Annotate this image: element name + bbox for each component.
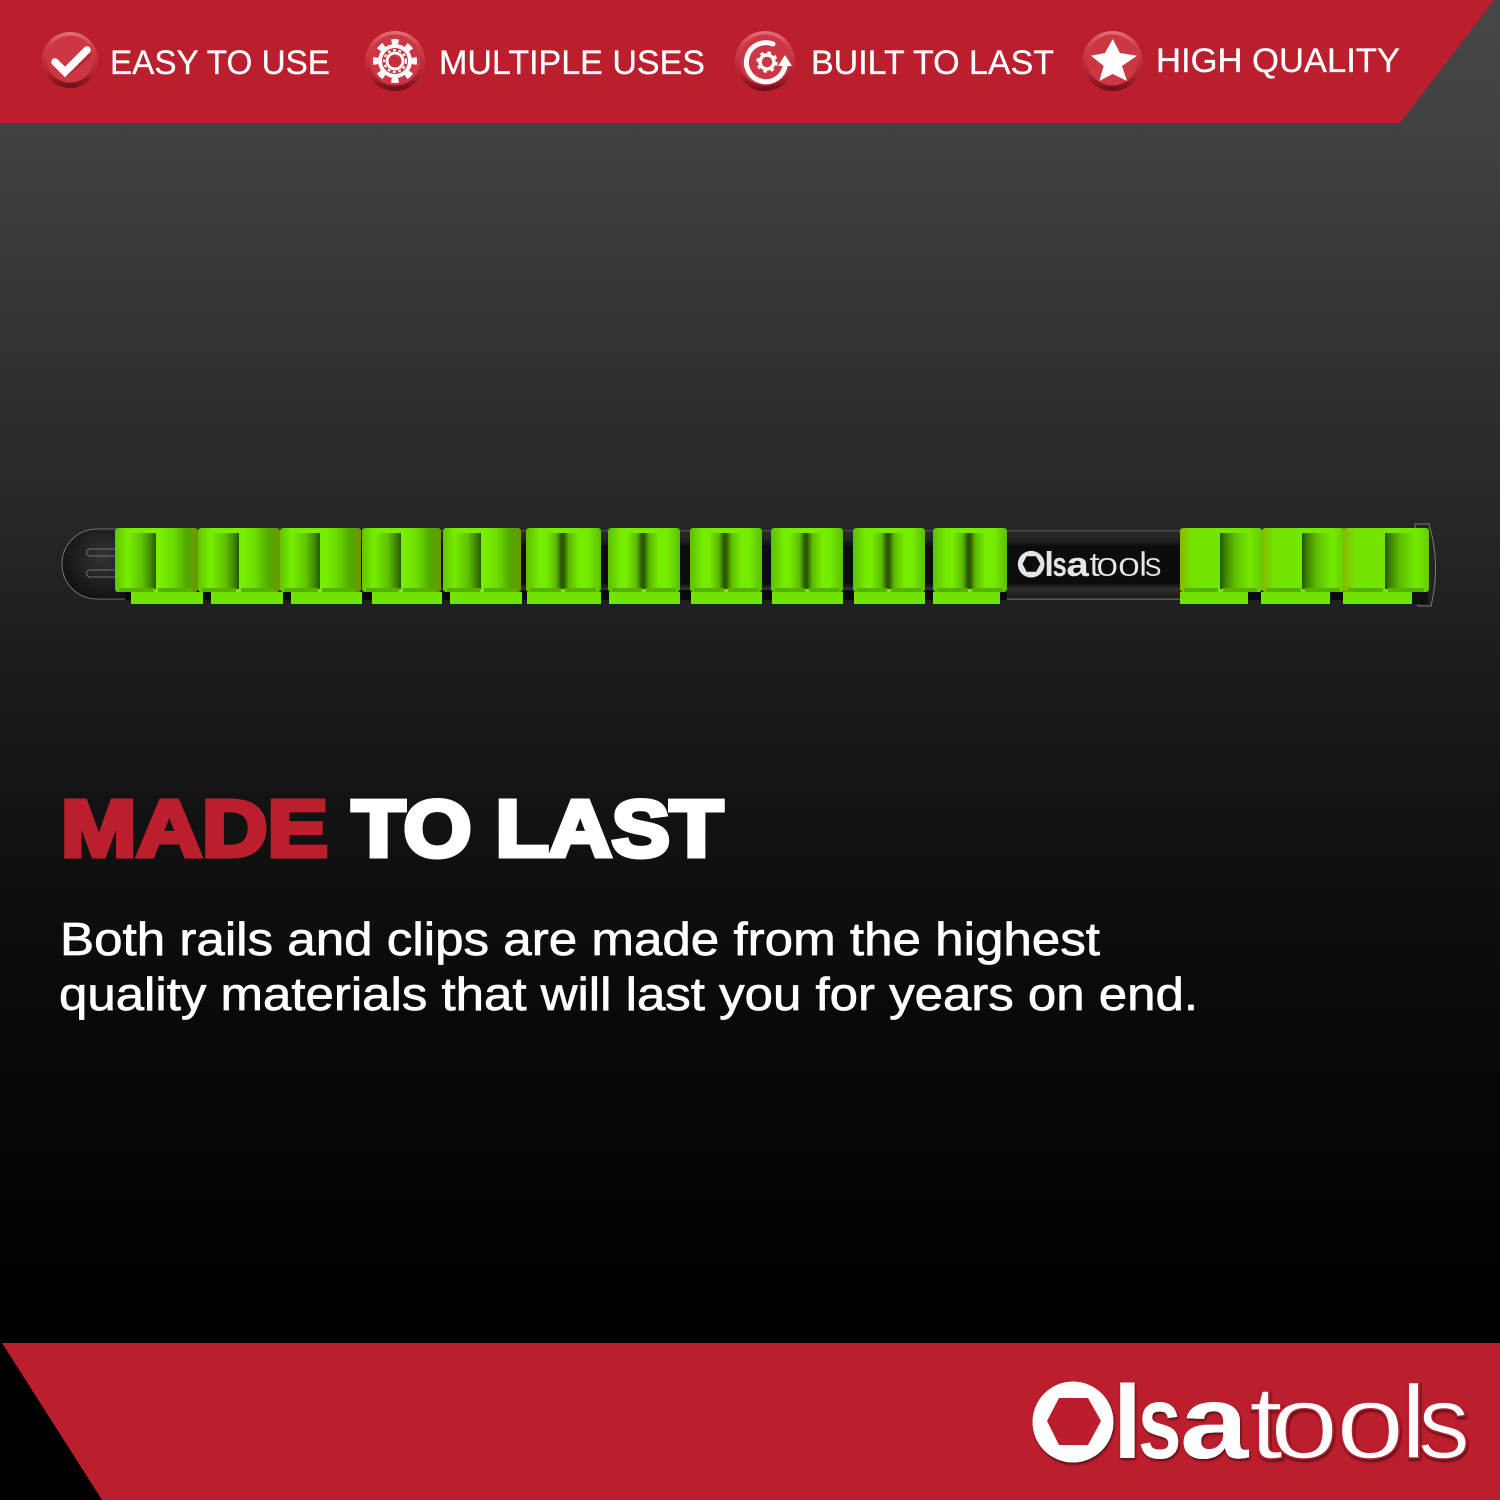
logo: olsatools: tool — [1249, 1365, 1427, 1481]
logo: olsatools: a — [1180, 1365, 1249, 1481]
body text: quality materials that will last you for years on end. — [59, 968, 1198, 1020]
top banner — [0, 0, 1494, 123]
icon: gear — [365, 31, 425, 91]
rail left end cap — [62, 529, 130, 599]
heading words: to last: TO LAST — [352, 784, 723, 873]
logo: olsatools: O — [1033, 1365, 1113, 1481]
clip 8 — [690, 528, 762, 604]
label: easy to use: EASY TO USE — [110, 44, 330, 82]
icon: star — [1082, 31, 1142, 91]
rail logo: l — [1044, 546, 1054, 584]
product: tool rail with clips — [62, 524, 1436, 606]
icon: gear with arrow — [735, 31, 795, 91]
clip 13 — [1261, 528, 1345, 604]
body text: Both rails and clips are made from the highest — [60, 913, 1100, 965]
bottom banner — [2, 1343, 1500, 1500]
clip 12 — [1180, 528, 1262, 604]
clip 1 — [115, 528, 203, 604]
heading: made to last — [61, 784, 723, 873]
label: multiple uses: MULTIPLE USES — [439, 44, 705, 82]
clip 4 — [362, 528, 442, 604]
clip 11 — [933, 528, 1007, 604]
rail logo: O — [1018, 546, 1044, 584]
clip 6 — [526, 528, 601, 604]
feature: easy to use — [42, 32, 330, 88]
body text — [59, 913, 1198, 1020]
feature: high quality — [1082, 31, 1400, 91]
rail right end cap — [1412, 524, 1436, 606]
rail logo: a — [1066, 545, 1090, 583]
feature: multiple uses — [365, 31, 705, 91]
logo: olsatools — [1032, 1365, 1470, 1481]
banner shape — [2, 1343, 1500, 1500]
logo: olsatools: s — [1138, 1365, 1181, 1481]
rail body — [190, 530, 1425, 600]
rail logo — [1018, 545, 1162, 584]
logo: olsatools: s — [1418, 1365, 1470, 1481]
banner shape — [0, 0, 1494, 123]
label: high quality: HIGH QUALITY — [1156, 42, 1400, 80]
rail logo: s — [1053, 547, 1067, 584]
clip 5 — [443, 528, 522, 604]
icon: check mark — [42, 32, 98, 88]
heading word: made: MADE — [61, 784, 328, 873]
clip 2 — [198, 528, 283, 604]
clip 10 — [853, 528, 925, 604]
rail right shadow gaps — [1180, 590, 1430, 600]
clip 14 — [1343, 528, 1429, 604]
clip 7 — [608, 528, 680, 604]
clip 9 — [771, 528, 843, 604]
rail bottom shadow gaps — [125, 590, 1007, 600]
rail logo: s — [1145, 546, 1162, 584]
clip 3 — [280, 528, 362, 604]
label: built to last: BUILT TO LAST — [811, 44, 1054, 82]
rail logo: tool — [1089, 545, 1148, 583]
feature: built to last — [735, 31, 1054, 91]
logo: olsatools: l — [1113, 1365, 1142, 1481]
